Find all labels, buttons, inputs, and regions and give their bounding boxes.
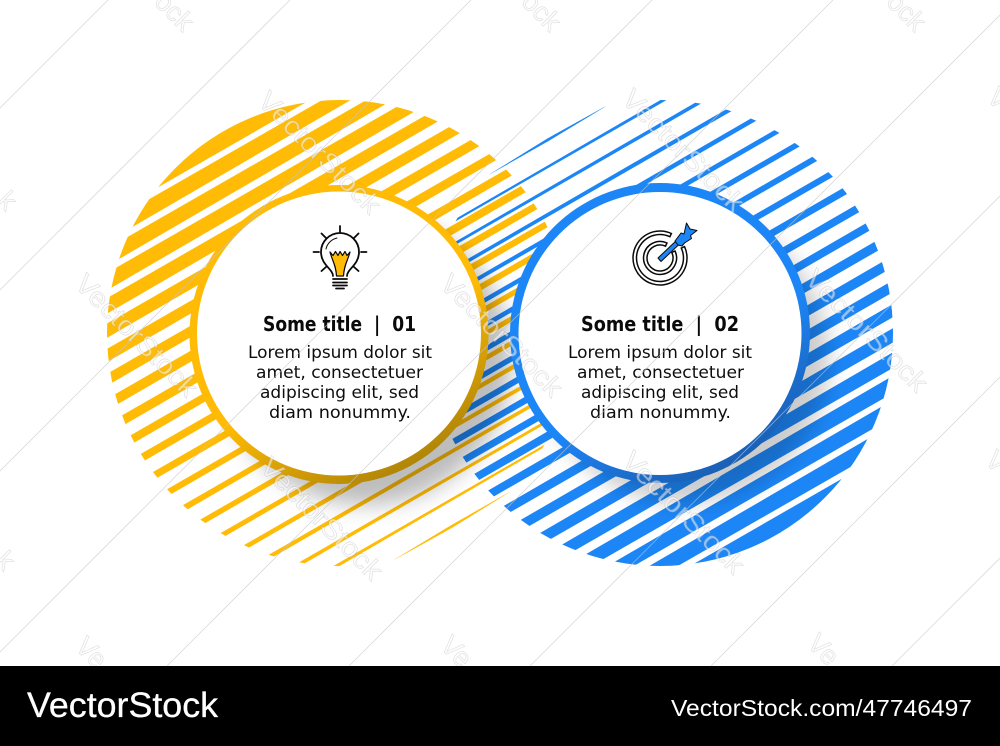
- shadow of yellow disc: [221, 215, 511, 505]
- body text 01: Lorem ipsum dolor sit: [248, 343, 433, 362]
- watermark text: VectorStock: [616, 445, 751, 580]
- yellow striped circle: [107, 100, 548, 566]
- watermark text: VectorStock: [799, 263, 934, 398]
- icon: light bulb: [314, 226, 366, 288]
- body text 01: [248, 343, 433, 422]
- body text 02: amet, consectetuer: [577, 363, 744, 382]
- blue striped circle: [452, 100, 893, 566]
- body text 02: diam nonummy.: [590, 403, 731, 422]
- watermark text: VectorStock: [252, 85, 387, 220]
- footer bar: [0, 666, 1000, 746]
- yellow ring: [190, 185, 488, 484]
- watermark text: Ve: [70, 631, 113, 674]
- panel: step 02: [510, 183, 810, 483]
- body text 01: adipiscing elit, sed: [260, 383, 419, 402]
- watermark text: Ve: [435, 630, 478, 673]
- white disc 02: [518, 192, 802, 475]
- panel: step 01: [190, 185, 488, 484]
- body text 01: amet, consectetuer: [256, 363, 423, 382]
- body text 02: Lorem ipsum dolor sit: [568, 343, 753, 362]
- watermark text: VectorStock: [616, 83, 751, 218]
- icon: target with dart: [633, 223, 697, 285]
- footer logo text: VectorStock: [27, 685, 218, 725]
- watermark text: VectorStock: [254, 451, 389, 586]
- body text 02: adipiscing elit, sed: [581, 383, 739, 402]
- watermark text: VectorStock: [69, 268, 204, 403]
- watermark text: VectorStock: [434, 268, 569, 403]
- title 02: Some title | 02: [581, 312, 739, 336]
- footer url text: VectorStock.com/47746497: [671, 695, 972, 721]
- title 01: Some title | 01: [263, 312, 416, 336]
- body text 01: diam nonummy.: [269, 403, 411, 422]
- shadow of blue disc: [539, 213, 829, 503]
- blue ring: [510, 183, 810, 483]
- watermark text: Ve: [802, 628, 845, 671]
- white disc 01: [197, 192, 481, 476]
- body text 02: [568, 343, 753, 422]
